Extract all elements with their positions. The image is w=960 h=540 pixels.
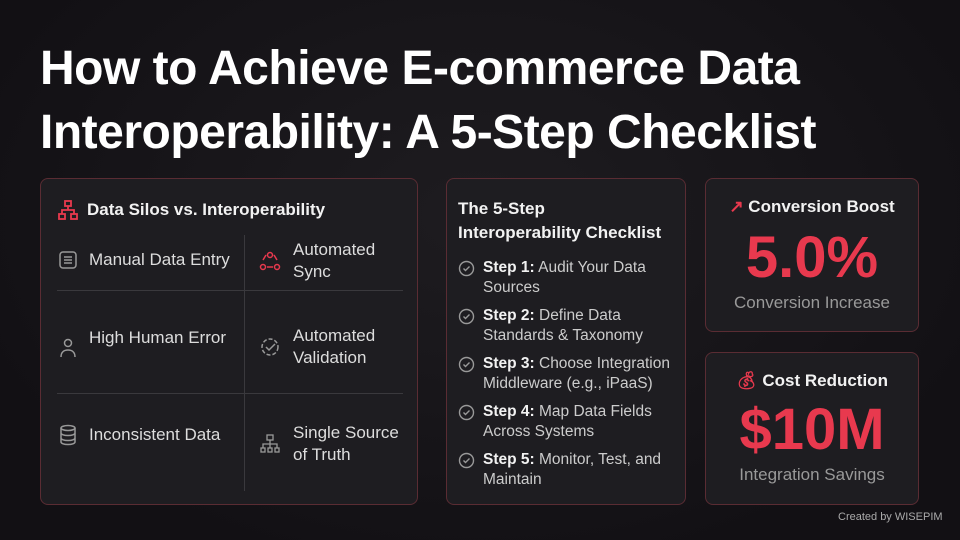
stat: $10M [739, 397, 885, 462]
heading: Interoperability Checklist [458, 223, 661, 242]
cell: single source of truth: of Truth [293, 445, 351, 464]
heading: The 5-Step [458, 199, 545, 218]
cell: inconsistent data: Inconsistent Data [89, 425, 220, 444]
heading: ↗ Conversion Boost [729, 197, 895, 216]
heading: Data Silos vs. Interoperability [87, 200, 325, 219]
label: Conversion Increase [734, 293, 890, 312]
cell: manual data entry: Manual Data Entry [89, 250, 230, 269]
step 4: Step 4: Map Data Fields Across Systems [483, 403, 652, 440]
panel: conversion boost [705, 178, 919, 332]
panel: cost reduction [705, 352, 919, 505]
cell: automated validation: Validation [293, 348, 366, 367]
cell: automated sync [260, 240, 375, 281]
cell: automated sync: Automated [293, 240, 375, 259]
cell: automated sync: Sync [293, 262, 331, 281]
title: Interoperability: A 5-Step Checklist [40, 106, 816, 159]
title [40, 42, 816, 159]
step 3: Step 3: Choose Integration Middleware (e.g., iPaaS) [483, 355, 670, 392]
label: Integration Savings [739, 465, 885, 484]
cell: automated validation [261, 326, 375, 367]
title: How to Achieve E-commerce Data [40, 42, 799, 95]
heading [458, 199, 661, 242]
credit: Created by WISEPIM [838, 511, 943, 523]
cell: high human error: High Human Error [89, 328, 226, 347]
cell: automated validation: Automated [293, 326, 375, 345]
step 5: Step 5: Monitor, Test, and Maintain [483, 451, 661, 488]
cell: high human error [60, 328, 226, 357]
panel: 5-step checklist [446, 178, 686, 505]
heading: 💰︎ Cost Reduction [736, 371, 888, 390]
cell: single source of truth [260, 423, 399, 464]
step 1: Step 1: Audit Your Data Sources [483, 259, 646, 296]
panel: data silos vs interoperability [40, 178, 418, 505]
stat: 5.0% [746, 225, 878, 290]
cell: single source of truth: Single Source [293, 423, 399, 442]
step 2: Step 2: Define Data Standards & Taxonomy [483, 307, 643, 344]
